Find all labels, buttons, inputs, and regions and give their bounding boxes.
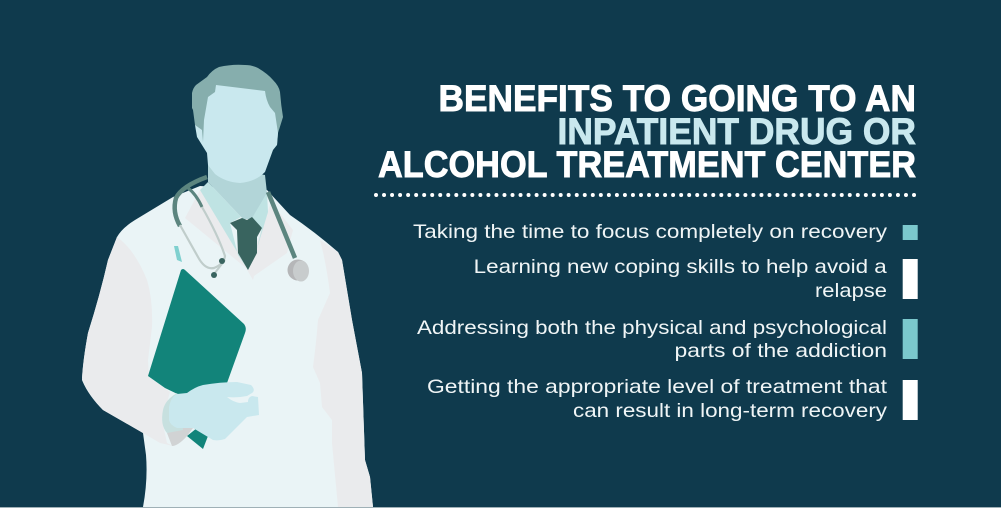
clipboard (148, 269, 246, 400)
item 4 (427, 376, 918, 422)
doctor illustration (82, 65, 373, 507)
chest piece (288, 260, 309, 282)
face (195, 85, 278, 183)
item 3: Addressing both the physical and psychological (417, 317, 887, 339)
lower ear tube (214, 260, 225, 274)
left sleeve (82, 237, 173, 446)
tube inner (188, 188, 202, 207)
pen (174, 246, 182, 262)
tie (230, 217, 262, 270)
ear tips (211, 258, 225, 278)
item 4: can result in long-term recovery (573, 400, 887, 422)
title line 1: BENEFITS TO GOING TO AN (438, 77, 916, 119)
item 3 (417, 317, 918, 362)
glove (169, 382, 259, 440)
item 1: Taking the time to focus completely on recovery (413, 221, 887, 243)
tube right (268, 192, 295, 258)
title line 2: INPATIENT DRUG OR (558, 110, 916, 152)
item 3: parts of the addiction (674, 340, 887, 362)
coat body (82, 186, 373, 507)
item 4: Getting the appropriate level of treatment that (427, 376, 888, 398)
item 2: Learning new coping skills to help avoid a (474, 256, 887, 278)
item 2: relapse (815, 280, 887, 302)
right collar (252, 193, 268, 252)
clipboard lower tip (187, 428, 208, 449)
benefit list (413, 221, 918, 422)
left lapel (185, 190, 254, 280)
shirt and neck (208, 165, 267, 219)
hair (192, 65, 283, 145)
title line 3: ALCOHOL TREATMENT CENTER (378, 143, 916, 185)
item 2 (474, 256, 918, 302)
tube left (175, 177, 207, 226)
right lapel (248, 205, 293, 276)
ear tubes (180, 207, 225, 268)
cuff (162, 393, 183, 433)
left collar (200, 182, 248, 270)
gray cuff (167, 428, 193, 446)
title (378, 77, 916, 185)
right sleeve (313, 240, 373, 507)
dotted rule (376, 193, 915, 197)
stethoscope (175, 177, 295, 274)
